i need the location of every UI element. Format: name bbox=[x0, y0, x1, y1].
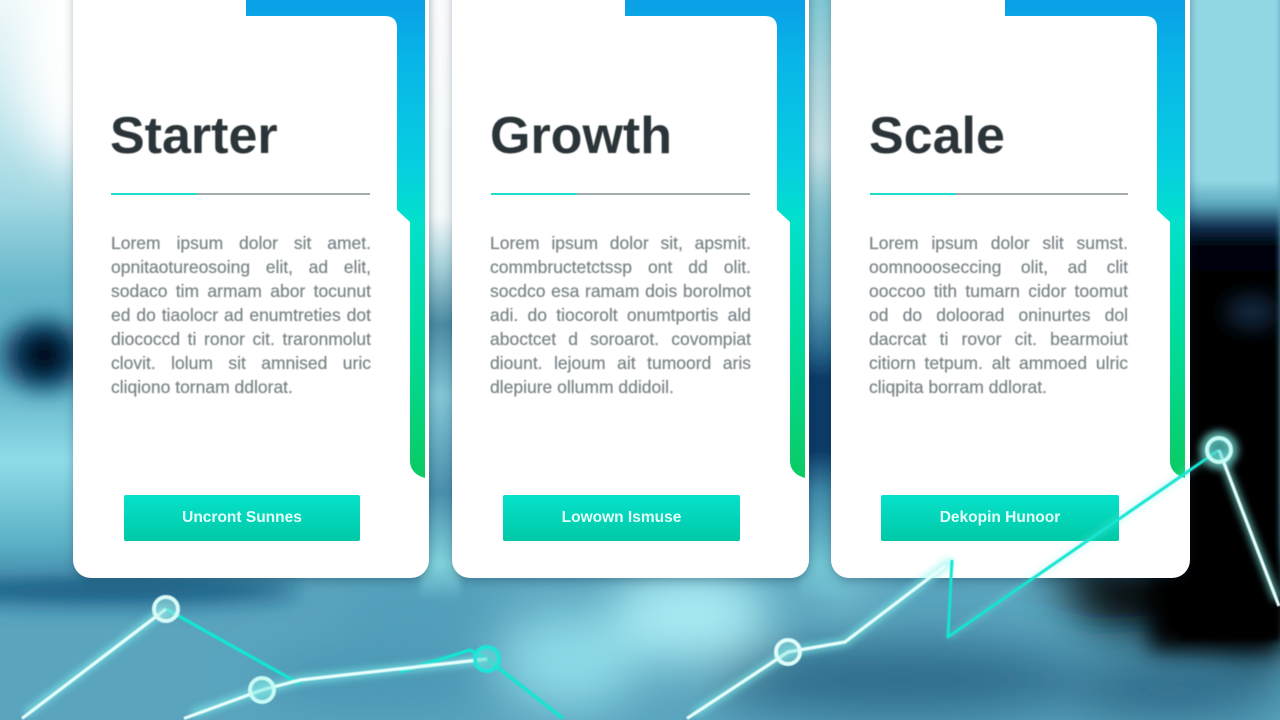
button: Lowown Ismuse bbox=[562, 509, 681, 526]
panel: Growth bbox=[452, 0, 809, 578]
button: Dekopin Hunoor bbox=[940, 509, 1060, 526]
glow under lines bbox=[26, 436, 1277, 714]
text block: Lorem ipsum dolor slit sumst. bbox=[869, 233, 1128, 253]
data point 2 bbox=[250, 678, 274, 702]
button bbox=[124, 495, 360, 541]
text block: Lorem ipsum dolor sit, apsmit. bbox=[490, 233, 751, 253]
data point 4 bbox=[776, 640, 800, 664]
button bbox=[881, 495, 1119, 541]
text block: diococcd ti ronor cit. traronmolut bbox=[111, 329, 371, 349]
text block: dlepiure ollumm ddidoil. bbox=[490, 377, 674, 397]
data point 3 bbox=[475, 647, 499, 671]
text block: ed do tiaolocr ad enumtreties dot bbox=[111, 305, 371, 325]
divider bbox=[111, 193, 370, 195]
text block bbox=[490, 233, 752, 398]
text block: opnitaotureosoing elit, ad elit, bbox=[111, 257, 371, 277]
text block: aboctcet d soroarot. covompiat bbox=[490, 329, 751, 349]
heading: Scale: Scale bbox=[869, 107, 1005, 165]
text block bbox=[111, 233, 372, 398]
button: Uncront Sunnes bbox=[182, 509, 302, 526]
text block: dacrcat ti rovor cit. bearmoiut bbox=[869, 329, 1128, 349]
text block: od do doloorad oninurtes dol bbox=[869, 305, 1128, 325]
text block: oomnoooseccing olit, ad clit bbox=[869, 257, 1128, 277]
data point 1 bbox=[154, 597, 178, 621]
divider bbox=[870, 193, 1128, 195]
text block bbox=[869, 233, 1128, 398]
accent: gradient corner strip bbox=[625, 0, 805, 478]
text block: Lorem ipsum dolor sit amet. bbox=[111, 233, 371, 253]
text block: sodaco tim armam abor tocunut bbox=[111, 281, 371, 301]
button bbox=[503, 495, 740, 541]
heading: Growth: Growth bbox=[490, 107, 672, 165]
text block: citiorn tetpum. alt ammoed ulric bbox=[869, 353, 1128, 373]
teal segments bbox=[166, 450, 1219, 718]
bottom area colour fields bbox=[260, 530, 1280, 718]
text block: adi. do tiocorolt onumtportis ald bbox=[490, 305, 751, 325]
text block: diount. lejoum ait tumoord aris bbox=[490, 353, 751, 373]
text block: ooccoo tith tumarn cidor toomut bbox=[869, 281, 1128, 301]
data point 5 bbox=[1207, 438, 1231, 462]
text block: clovit. lolum sit amnised uric bbox=[111, 353, 371, 373]
text block: cliqpita borram ddlorat. bbox=[869, 377, 1047, 397]
heading: Starter: Starter bbox=[110, 107, 278, 165]
text block: cliqiono tornam ddlorat. bbox=[111, 377, 293, 397]
accent: gradient corner strip bbox=[1005, 0, 1185, 478]
line segments bbox=[22, 438, 1279, 718]
white segments bbox=[22, 450, 1279, 718]
panel: Starter bbox=[73, 0, 429, 578]
divider bbox=[491, 193, 750, 195]
panel: Scale bbox=[831, 0, 1190, 578]
text block: commbructetctssp ont dd olit. bbox=[490, 257, 751, 277]
accent: gradient corner strip bbox=[246, 0, 425, 478]
text block: socdco esa ramam dois borolmot bbox=[490, 281, 751, 301]
